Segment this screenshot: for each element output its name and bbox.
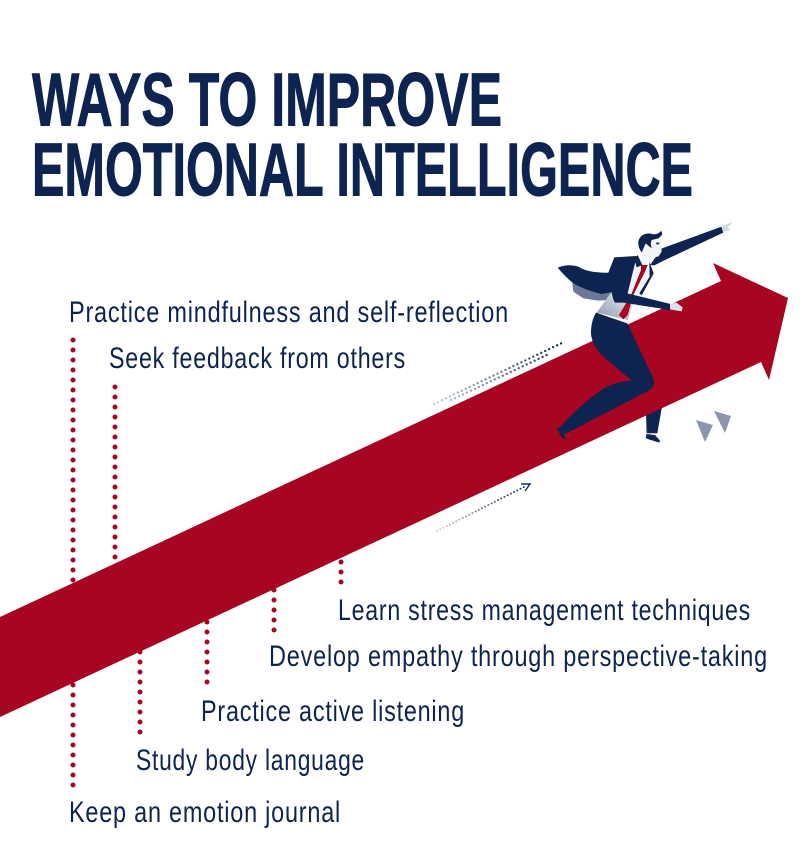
small triangle right	[714, 411, 731, 433]
label: body language: Study body language	[136, 744, 365, 777]
back leg	[646, 407, 662, 443]
red arrow	[0, 263, 788, 717]
title: WAYS TO IMPROVE	[32, 58, 502, 142]
dotted arrow below arrow	[437, 484, 530, 531]
dotted connector: stress	[338, 562, 344, 583]
dotted connector: journal	[70, 685, 76, 786]
label: feedback: Seek feedback from others	[109, 342, 406, 375]
upper body	[558, 227, 723, 320]
title	[32, 58, 693, 212]
label: mindfulness: Practice mindfulness and self-reflection	[69, 296, 509, 329]
dotted connector: active listening	[204, 622, 210, 683]
dotted connector: empathy	[272, 590, 276, 631]
small triangle left	[696, 420, 713, 442]
dotted connector: body language	[138, 652, 142, 733]
trousers	[557, 313, 654, 441]
businessman figure	[557, 222, 733, 441]
pointing hand	[721, 222, 733, 232]
dotted speed lines above arrow	[434, 342, 564, 404]
label: listening: Practice active listening	[201, 695, 465, 728]
dotted connector: mindfulness	[70, 340, 76, 581]
dotted connector: feedback	[112, 387, 118, 564]
label: journal: Keep an emotion journal	[69, 796, 341, 829]
